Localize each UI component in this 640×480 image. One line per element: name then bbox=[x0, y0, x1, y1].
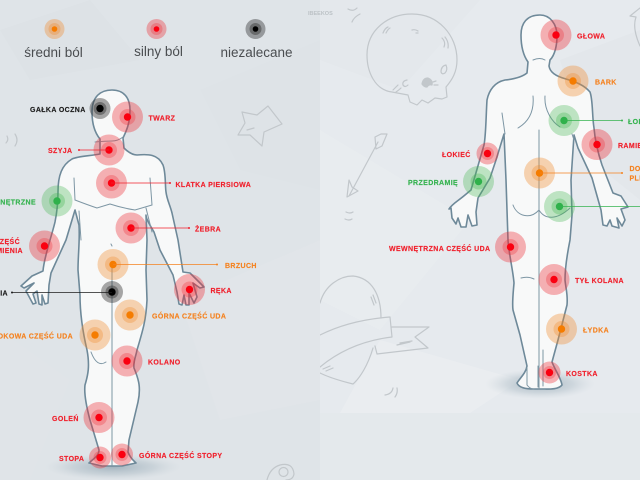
shadow: front figure bbox=[45, 454, 181, 480]
legend: niezalecane bbox=[220, 19, 293, 60]
marker: głowa: GŁOWA bbox=[577, 34, 605, 40]
watermark: IBEEKOS bbox=[308, 11, 333, 17]
marker: gałka oczna bbox=[30, 98, 110, 119]
marker: szyja: SZYJA bbox=[48, 148, 72, 155]
marker: łokieć bbox=[442, 142, 498, 164]
marker: łydka: ŁYDKA bbox=[583, 328, 609, 334]
shadow: back figure bbox=[485, 369, 595, 399]
marker: brzuch bbox=[98, 249, 257, 280]
marker: wewnętrzna część uda bbox=[389, 232, 526, 262]
marker: ręka bbox=[174, 274, 232, 305]
marker: tył kolana: TYŁ KOLANA bbox=[575, 278, 624, 285]
marker: pośladek bbox=[544, 191, 640, 222]
marker: goleń: GOLEŃ bbox=[52, 414, 79, 423]
marker: żebra bbox=[116, 212, 221, 244]
marker: genitalia bbox=[0, 281, 123, 303]
marker: dolna część pleców bbox=[524, 158, 640, 188]
doodle: arrow bbox=[345, 134, 387, 220]
marker: wewnętrzne bbox=[0, 186, 72, 216]
doodle: spiral bbox=[267, 464, 294, 480]
marker: klatka piersiowa: KLATKA PIERSIOWA bbox=[176, 182, 251, 189]
background: right paper bbox=[320, 0, 640, 480]
marker: gałka oczna: GAŁKA OCZNA bbox=[30, 107, 86, 114]
legend: średni ból bbox=[24, 19, 83, 60]
marker: przedramię bbox=[408, 166, 494, 197]
marker: łokieć: ŁOKIEĆ bbox=[442, 150, 471, 159]
doodle: star bbox=[238, 106, 282, 146]
marker: łopatka bbox=[548, 105, 640, 136]
marker: żebra: ŻEBRA bbox=[195, 226, 221, 234]
marker: górna część uda: GÓRNA CZĘŚĆ UDA bbox=[152, 312, 226, 320]
doodle: skull bbox=[348, 8, 457, 105]
marker: klatka piersiowa bbox=[96, 168, 251, 198]
marker: twarz: TWARZ bbox=[148, 116, 176, 122]
marker: goleń bbox=[52, 402, 114, 433]
legend: średni ból: średni ból bbox=[24, 45, 83, 60]
marker: szyja bbox=[48, 134, 124, 166]
marker: kolano: KOLANO bbox=[148, 360, 181, 366]
marker: bark bbox=[558, 66, 617, 96]
marker: głowa bbox=[540, 20, 605, 50]
doodle: heart with ribbon bbox=[320, 276, 429, 397]
marker: środkowa część uda bbox=[0, 320, 110, 350]
marker: stopa bbox=[59, 446, 111, 468]
marker: górna część uda bbox=[114, 300, 226, 330]
marker: twarz bbox=[112, 102, 176, 132]
marker: przedramię: PRZEDRAMIĘ bbox=[408, 180, 458, 187]
figure: front body bbox=[21, 90, 204, 466]
marker: kostka: KOSTKA bbox=[566, 371, 598, 378]
background: left paper bbox=[0, 0, 320, 480]
marker: część ramienia bbox=[0, 230, 60, 262]
marker: kolano bbox=[112, 346, 181, 376]
marker: górna część stopy bbox=[111, 444, 222, 466]
marker: ramię bbox=[582, 129, 640, 160]
marker: tył kolana bbox=[538, 264, 624, 295]
marker: górna część stopy: GÓRNA CZĘŚĆ STOPY bbox=[139, 451, 222, 460]
marker: łydka bbox=[546, 314, 609, 344]
marker: ręka: RĘKA bbox=[210, 288, 232, 295]
marker: kostka bbox=[538, 362, 598, 384]
marker: stopa: STOPA bbox=[59, 456, 84, 463]
marker: wewnętrzna część uda: WEWNĘTRZNA CZĘŚĆ UDA bbox=[389, 244, 490, 253]
legend: silny ból bbox=[134, 19, 183, 59]
legend: niezalecane: niezalecane bbox=[220, 45, 293, 60]
legend: silny ból: silny ból bbox=[134, 44, 183, 59]
doodle: top right corner bbox=[630, 8, 640, 46]
marker: bark: BARK bbox=[595, 80, 617, 86]
figure: back body bbox=[449, 15, 628, 389]
marker: brzuch: BRZUCH bbox=[225, 263, 257, 270]
doodle: small marks bbox=[6, 134, 17, 146]
